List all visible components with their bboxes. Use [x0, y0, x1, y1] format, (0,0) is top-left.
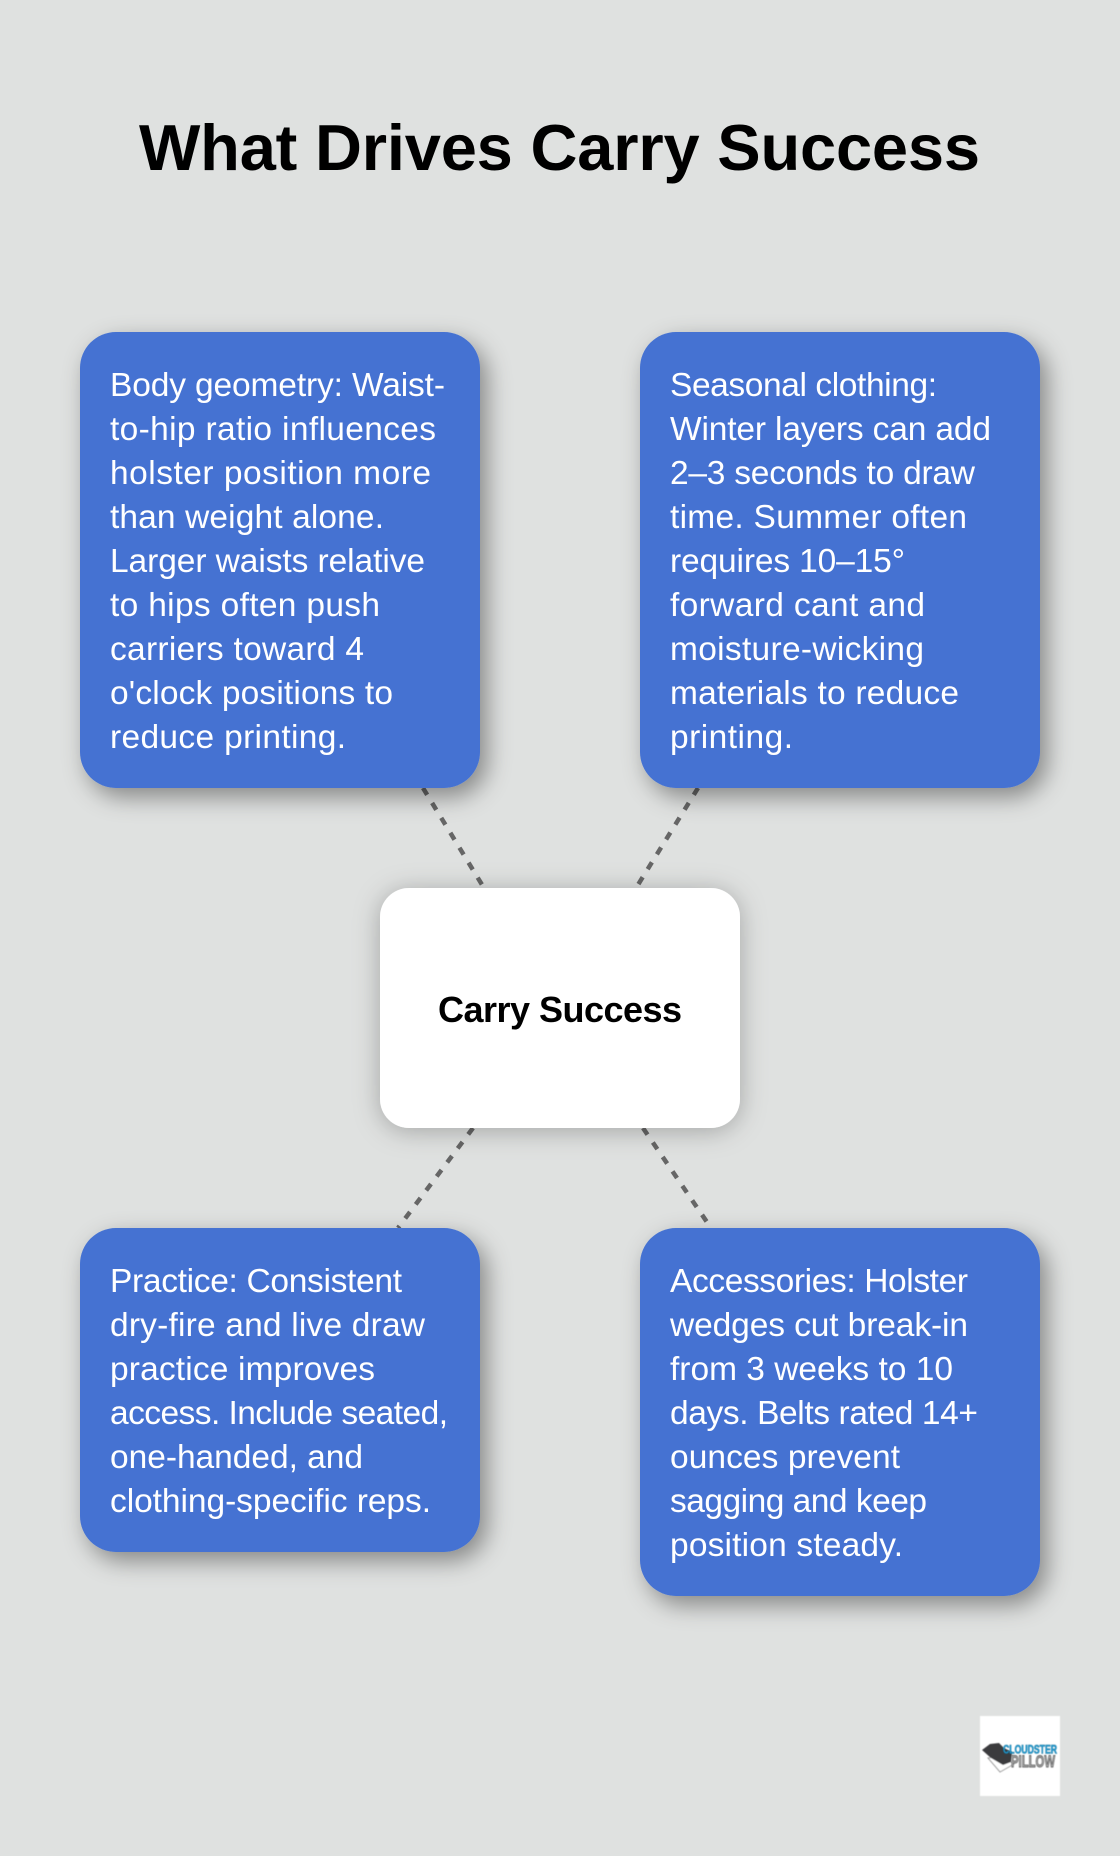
title: What Drives Carry Success [139, 111, 980, 184]
panel: practice [80, 1228, 480, 1552]
connectors: dashed lines from cards to centre [398, 788, 711, 1228]
accessories text: sagging and keep [670, 1483, 927, 1520]
body geometry text: to hips often push [110, 587, 380, 624]
panel: accessories [640, 1228, 1040, 1596]
practice text: access. Include seated, [110, 1395, 448, 1432]
body geometry text: carriers toward 4 [110, 631, 364, 668]
seasonal clothing text: Winter layers can add [670, 411, 991, 448]
practice text [110, 1263, 448, 1520]
panel: seasonal clothing [640, 332, 1040, 788]
panel: body geometry [80, 332, 480, 788]
logo wordmark: PILLOW [1011, 1753, 1055, 1771]
panel: centre node [380, 888, 740, 1128]
body geometry text: to-hip ratio influences [110, 411, 436, 448]
body geometry text: than weight alone. [110, 499, 384, 536]
seasonal clothing text: moisture-wicking [670, 631, 924, 668]
seasonal clothing text: requires 10–15° [670, 543, 905, 580]
practice text: Practice: Consistent [110, 1263, 403, 1300]
practice text: clothing-specific reps. [110, 1483, 431, 1520]
accessories text: days. Belts rated 14+ [670, 1395, 978, 1432]
seasonal clothing text: Seasonal clothing: [670, 367, 937, 404]
practice text: practice improves [110, 1351, 375, 1388]
logo wordmark [1003, 1744, 1058, 1771]
accessories text: wedges cut break-in [669, 1307, 968, 1344]
accessories text: ounces prevent [670, 1439, 901, 1476]
practice text: one-handed, and [110, 1439, 363, 1476]
centre label: Carry Success [438, 989, 682, 1030]
seasonal clothing text: forward cant and [670, 587, 925, 624]
accessories text [669, 1263, 978, 1564]
body geometry text: reduce printing. [110, 719, 346, 756]
body geometry text: o'clock positions to [110, 675, 393, 712]
body geometry text [110, 367, 445, 756]
accessories text: from 3 weeks to 10 [670, 1351, 953, 1388]
logo wordmark: CLOUDSTER [1003, 1744, 1058, 1756]
body geometry text: Body geometry: Waist- [110, 367, 445, 404]
accessories text: position steady. [670, 1527, 903, 1564]
logo: Cloudster Pillow [980, 1716, 1060, 1796]
icon: pillow [982, 1743, 1014, 1772]
practice text: dry-fire and live draw [110, 1307, 426, 1344]
seasonal clothing text [670, 367, 991, 756]
body geometry text: holster position more [110, 455, 431, 492]
seasonal clothing text: time. Summer often [670, 499, 967, 536]
seasonal clothing text: materials to reduce [670, 675, 959, 712]
seasonal clothing text: printing. [670, 719, 793, 756]
accessories text: Accessories: Holster [670, 1263, 968, 1300]
body geometry text: Larger waists relative [110, 543, 425, 580]
seasonal clothing text: 2–3 seconds to draw [670, 455, 976, 492]
